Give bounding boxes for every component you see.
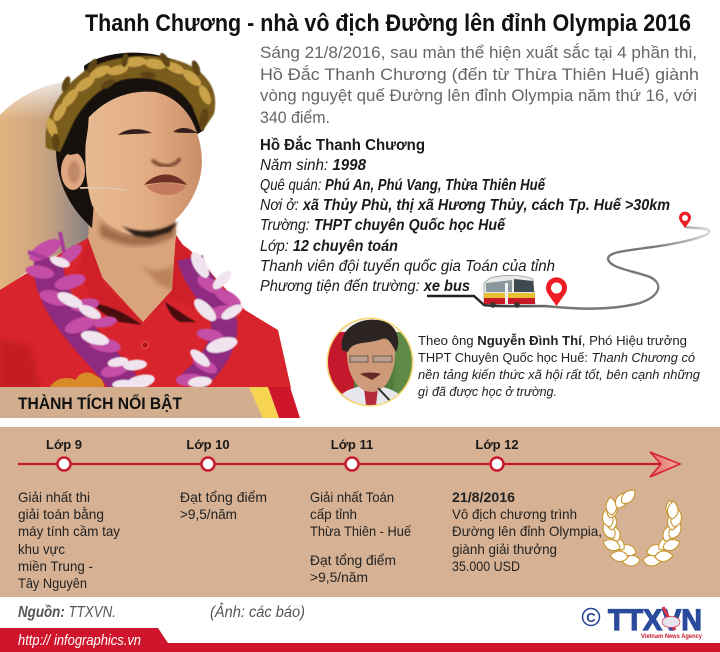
profile details: Quê quán: Phú An, Phú Vang, Thừa Thiên Huế bbox=[260, 177, 547, 194]
timeline year labels: Lớp 10 bbox=[186, 437, 230, 452]
column: grade 9: miền Trung - bbox=[18, 558, 93, 574]
column: grade 9: Giải nhất thi bbox=[18, 489, 90, 505]
column: grade 11: Đạt tổng điểm bbox=[310, 552, 396, 568]
profile details: Trường: THPT chuyên Quốc học Huế bbox=[260, 217, 507, 234]
timeline year labels bbox=[46, 437, 519, 452]
neck bbox=[88, 205, 176, 322]
column: grade 11 bbox=[310, 489, 411, 585]
profile details: Hồ Đắc Thanh Chương bbox=[260, 135, 425, 154]
laurel wreath bbox=[44, 51, 215, 152]
eyes bbox=[118, 128, 197, 135]
quote: Theo ông Nguyễn Đình Thí, Phó Hiệu trưởng bbox=[418, 333, 687, 348]
icon: large map pin bbox=[546, 277, 567, 306]
column: grade 10: Đạt tổng điểm bbox=[180, 489, 267, 505]
column: grade 12 bbox=[452, 489, 602, 574]
profile details: Nơi ở: xã Thủy Phù, thị xã Hương Thủy, cách Tp. Huế >30km bbox=[260, 197, 670, 214]
timeline year labels: Lớp 9 bbox=[46, 437, 82, 452]
hair back bbox=[56, 120, 100, 228]
flower garland right bbox=[176, 249, 245, 388]
intro paragraph: Hồ Đắc Thanh Chương (đến từ Thừa Thiên Huế) giành bbox=[260, 65, 699, 84]
timeline year labels: Lớp 11 bbox=[331, 437, 373, 452]
column: grade 10 bbox=[180, 489, 267, 522]
quote bbox=[418, 333, 701, 399]
quote: gì đã được học ở trường. bbox=[418, 384, 557, 399]
profile details: Năm sinh: 1998 bbox=[260, 157, 366, 174]
source credit: Nguồn: TTXVN. bbox=[18, 604, 116, 621]
panel: timeline bbox=[0, 427, 720, 597]
column: grade 9: khu vực bbox=[18, 541, 65, 557]
profile details: Thanh viên đội tuyển quốc gia Toán của tỉnh bbox=[260, 257, 555, 275]
column: grade 11: cấp tỉnh bbox=[310, 506, 357, 522]
quote: nền tảng kiến thức xã hội rất tốt, bên cạnh những bbox=[418, 367, 701, 382]
shirt collar bbox=[78, 235, 198, 348]
column: grade 10: >9,5/năm bbox=[180, 506, 237, 522]
column: grade 12: Đường lên đỉnh Olympia, bbox=[452, 523, 602, 539]
portrait: Nguyễn Đình Thí bbox=[326, 318, 414, 408]
profile details bbox=[260, 135, 670, 295]
logo: TTXVN: TTXVN bbox=[608, 604, 702, 637]
hair top bbox=[84, 53, 205, 135]
route line bbox=[427, 227, 709, 309]
footer bar bbox=[0, 628, 720, 652]
timeline year labels: Lớp 12 bbox=[475, 437, 519, 452]
column: grade 9: máy tính cầm tay bbox=[18, 523, 120, 539]
column: grade 11: >9,5/năm bbox=[310, 569, 368, 585]
timeline nodes bbox=[58, 458, 504, 470]
source credit bbox=[18, 603, 305, 621]
nose and mouth bbox=[144, 158, 187, 195]
intro paragraph: Sáng 21/8/2016, sau màn thể hiện xuất sắc tại 4 phần thi, bbox=[260, 43, 697, 62]
portrait shadow bbox=[0, 80, 95, 292]
intro paragraph: 340 điểm. bbox=[260, 108, 330, 127]
column: grade 12: giành giải thưởng bbox=[452, 541, 557, 557]
column: grade 12: Vô địch chương trình bbox=[452, 506, 577, 522]
icon: small map pin bbox=[679, 212, 691, 228]
column: grade 11: Giải nhất Toán bbox=[310, 489, 394, 505]
profile details: Lớp: 12 chuyên toán bbox=[260, 238, 398, 255]
profile details: Phương tiện đến trường: xe bus bbox=[260, 278, 470, 295]
website url: http:// infographics.vn bbox=[18, 633, 141, 649]
banner heading: THÀNH TÍCH NỔI BẬT bbox=[18, 394, 183, 413]
column: grade 9 bbox=[18, 489, 120, 591]
quote: THPT Chuyên Quốc học Huế: Thanh Chương có bbox=[418, 350, 695, 365]
photo credit: (Ảnh: các báo) bbox=[210, 603, 305, 621]
column: grade 9: Tây Nguyên bbox=[18, 575, 87, 591]
intro paragraph bbox=[260, 43, 699, 127]
column: grade 9: giải toán bằng bbox=[18, 506, 104, 522]
flower garland left bbox=[25, 232, 156, 392]
ear bbox=[61, 152, 85, 190]
logo: TTXVN: Vietnam News Agency bbox=[641, 634, 703, 640]
column: grade 11: Thừa Thiên - Huế bbox=[310, 523, 411, 539]
timeline arrow bbox=[18, 452, 680, 477]
face bbox=[85, 92, 202, 236]
icon: laurel wreath bbox=[599, 487, 685, 567]
section banner: achievements bbox=[0, 387, 300, 418]
shirt emblem bbox=[50, 373, 104, 387]
column: grade 12: 21/8/2016 bbox=[452, 489, 515, 505]
portrait photo bbox=[0, 51, 291, 392]
intro paragraph: vòng nguyệt quế Đường lên đỉnh Olympia năm thứ 16, với bbox=[260, 86, 697, 105]
logo: TTXVN: C bbox=[586, 610, 596, 625]
red shirt bbox=[0, 238, 291, 388]
fringe shadow bbox=[60, 98, 90, 155]
icon: bus bbox=[484, 275, 535, 308]
chin shadow bbox=[122, 222, 178, 238]
microphone bbox=[80, 188, 126, 190]
column: grade 12: 35.000 USD bbox=[452, 558, 520, 574]
